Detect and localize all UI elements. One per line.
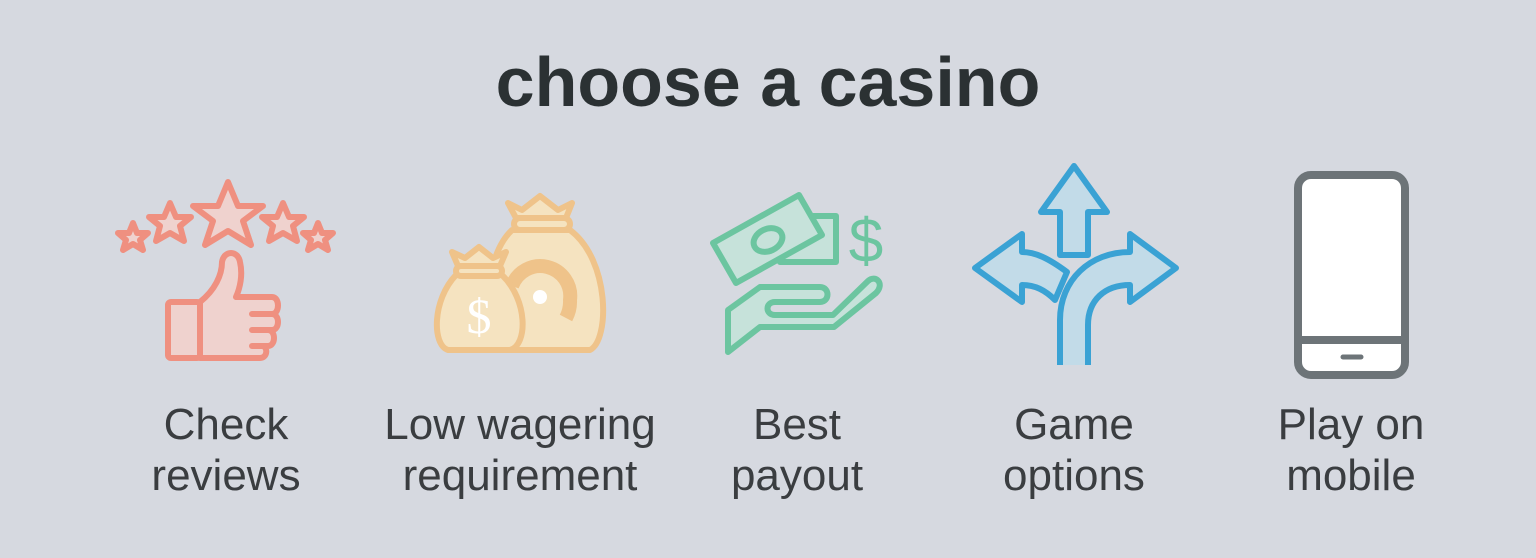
label: game options: options xyxy=(1003,451,1145,500)
label: best payout xyxy=(731,400,863,500)
label: best payout: payout xyxy=(731,451,863,500)
label: game options: Game xyxy=(1014,400,1134,449)
icon: cash in hand: $ xyxy=(849,207,883,276)
icon: money bags: $ xyxy=(466,288,492,344)
label: low wagering xyxy=(384,400,656,500)
icon: direction arrows xyxy=(975,166,1176,365)
label: check reviews: Check xyxy=(164,400,288,449)
label: play on mobile: mobile xyxy=(1286,451,1416,500)
label: low wagering: requirement xyxy=(403,451,637,500)
label: check reviews: reviews xyxy=(151,451,301,500)
label: check reviews xyxy=(151,400,301,500)
label: game options xyxy=(1003,400,1145,500)
label: low wagering: Low wagering xyxy=(384,400,656,449)
icon: mobile phone xyxy=(1298,175,1405,375)
label: best payout: Best xyxy=(753,400,841,449)
icon: stars and thumbs up xyxy=(118,182,333,358)
title: choose a casino xyxy=(496,43,1040,121)
label: play on mobile: Play on xyxy=(1278,400,1424,449)
icon: money bags xyxy=(437,196,603,350)
label: play on mobile xyxy=(1278,400,1424,500)
icon: cash in hand xyxy=(713,195,883,352)
